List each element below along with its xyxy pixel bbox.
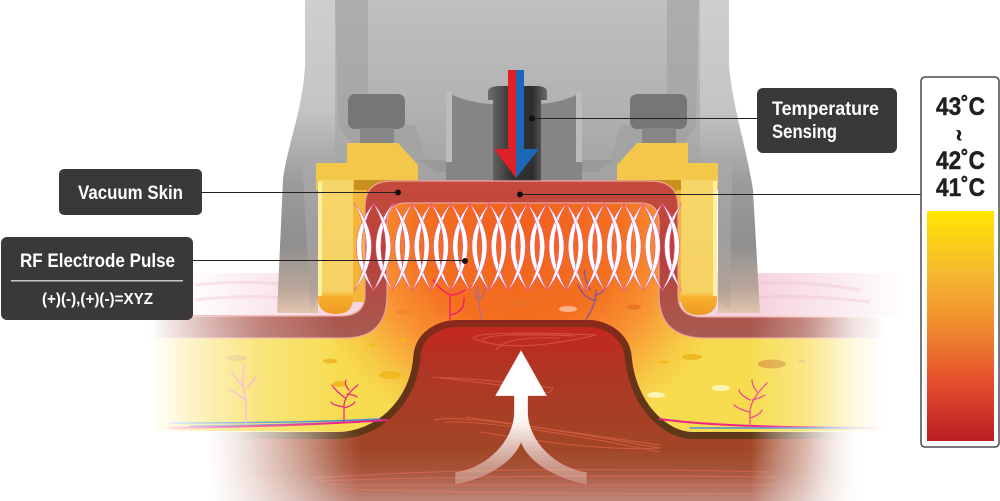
RF electrode pulse arcs: [354, 203, 682, 291]
label: RF Electrode Pulse: [1, 237, 193, 320]
panel: vacuum skin band: [100, 181, 950, 338]
left inner facet: [302, 160, 318, 311]
screw right: [630, 94, 687, 144]
screw left: [348, 94, 405, 144]
muscle fibre lines: [205, 333, 775, 494]
label: RF Electrode Pulse: RF Electrode Pulse: [20, 251, 175, 272]
right inner facet: [718, 160, 732, 311]
label: Temperature Sensing: [757, 88, 897, 153]
leader line: temperature: [529, 116, 760, 122]
panel: skin surface: [185, 273, 905, 317]
left column: [335, 0, 368, 125]
central holder: [419, 160, 612, 172]
arrow: temperature sensing: [494, 70, 539, 178]
left wing: [277, 0, 340, 313]
range symbol: ≀: [955, 127, 963, 144]
panel: heated fat layer: [100, 200, 950, 433]
bottom fade: [0, 470, 1000, 501]
leader line: temperature scale: [517, 192, 921, 198]
fat cells: [227, 298, 806, 398]
right gold bracket: [615, 143, 718, 315]
blood vessels: [170, 270, 890, 428]
left bracket shadow: [338, 125, 430, 172]
panel: muscle mound: [90, 320, 940, 501]
label: RF Electrode Pulse: (+)(-),(+)(-)=XYZ: [42, 291, 153, 308]
arrow: heat rising: [455, 350, 587, 485]
temperature 41: 41˚C: [936, 174, 985, 202]
panel: device housing: [277, 0, 760, 315]
temperature 42: 42˚C: [936, 147, 985, 175]
left gold bracket: [316, 143, 420, 314]
label: Vacuum Skin: Vacuum Skin: [78, 183, 183, 204]
right lower fade over muscle: [750, 431, 1000, 501]
orange heat glow: [285, 200, 755, 433]
gradient bar: [927, 211, 994, 441]
label: Temperature Sensing: Temperature: [772, 99, 879, 120]
right bracket shadow: [606, 125, 696, 172]
leader line: RF electrode: [175, 258, 468, 264]
mound outline: [90, 324, 940, 436]
panel: temperature scale: [921, 77, 999, 447]
sensor tube: [488, 86, 547, 181]
label: Temperature Sensing: Sensing: [772, 122, 837, 143]
label: Vacuum Skin: [59, 169, 202, 215]
right wing: [694, 0, 760, 313]
left lower fade over muscle: [0, 431, 360, 501]
leader line: vacuum skin: [198, 190, 401, 196]
temperature 43: 43˚C: [936, 93, 985, 121]
right white fade: [750, 316, 1000, 501]
right column: [667, 0, 699, 125]
housing body: [335, 0, 700, 190]
left white fade: [0, 316, 340, 501]
